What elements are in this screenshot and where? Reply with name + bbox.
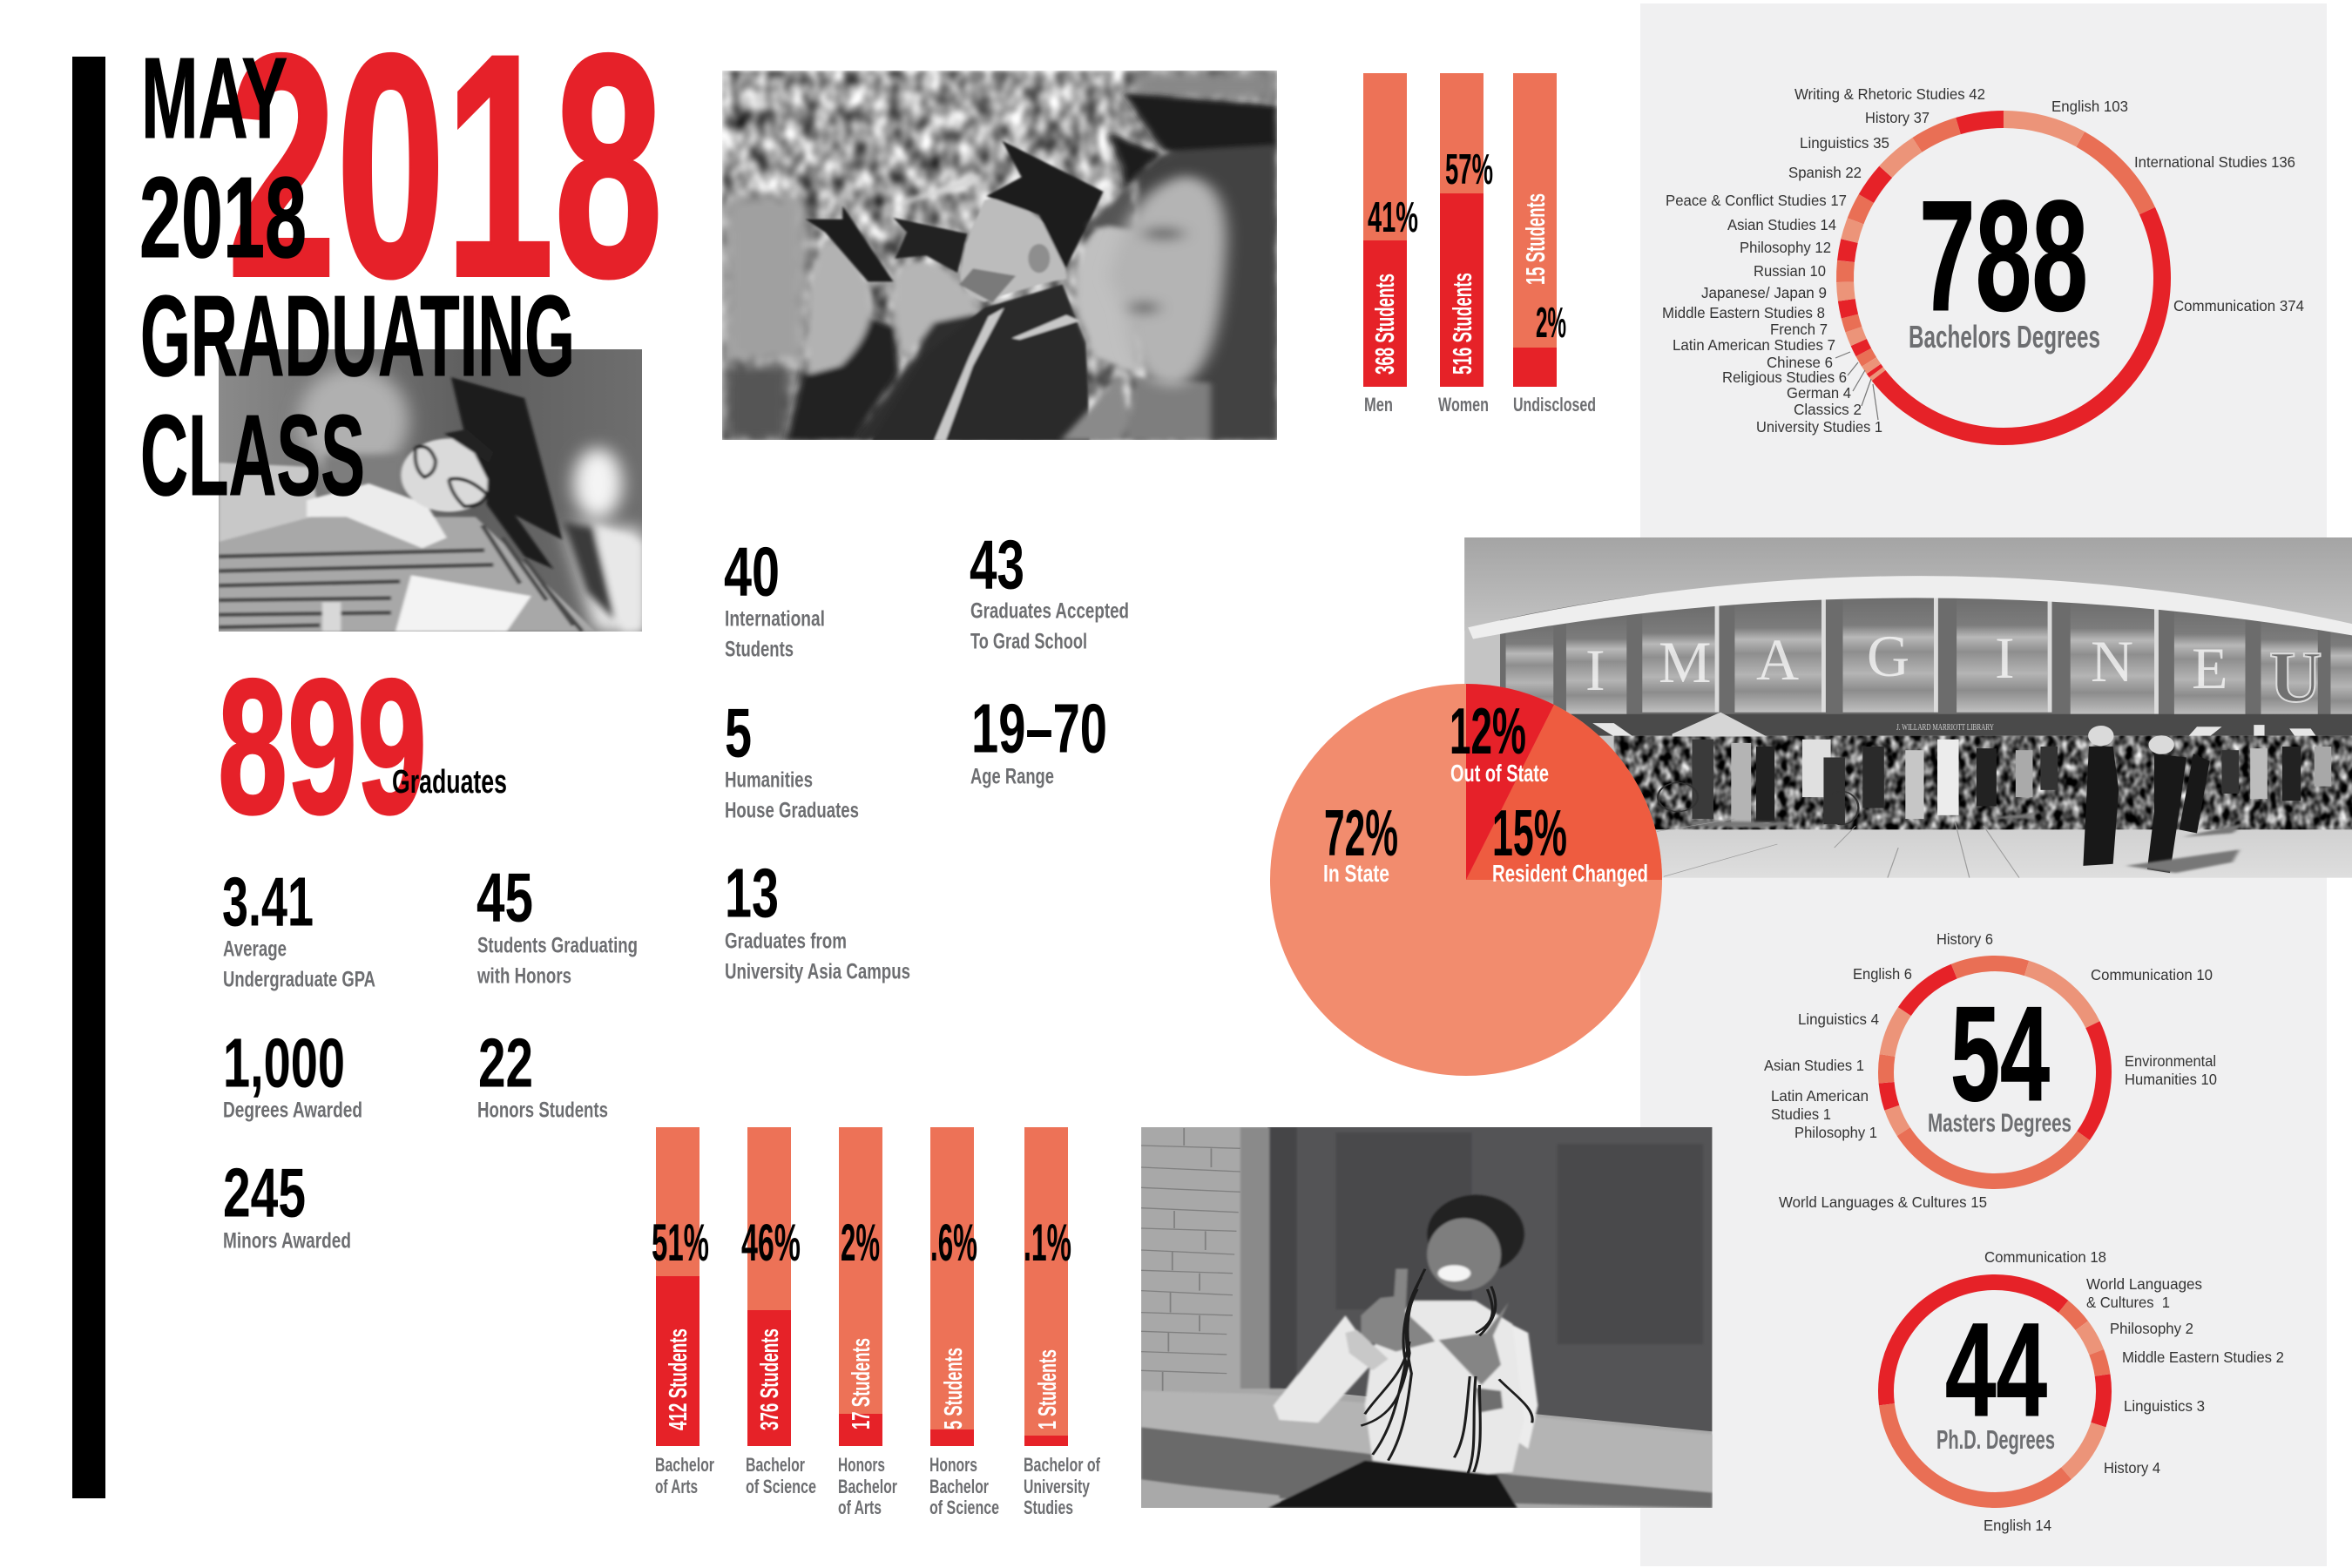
stat: 45 honors graduates: with Honors [476,963,571,988]
pie chart: residency: In State [1323,860,1389,887]
donut chart: 54 masters degrees: 54 [1950,978,2050,1129]
donut chart: 44 PhD degrees [1842,1238,2284,1544]
donut chart: 788 bachelors degrees: University Studies 1 [1756,418,1882,436]
donut chart: 788 bachelors degrees: Middle Eastern Studies 8 [1662,304,1825,321]
title: May 2018 Graduating Class: MAY [141,34,287,162]
bar chart: degree types: 2% [841,1213,880,1272]
bar chart: degree types: University [1024,1476,1091,1497]
stat: 40 international students: Students [725,638,794,662]
bar chart: degree types: of Arts [655,1476,698,1497]
title: May 2018 Graduating Class [139,34,575,519]
stat: 13 asia campus: Graduates from [725,929,847,953]
donut chart: 788 bachelors degrees: Classics 2 [1794,401,1862,418]
stat: 5 humanities house [725,693,859,822]
building banner lettering: E [2192,635,2228,701]
stat: 40 international students [724,533,825,662]
pie chart: residency: Resident Changed [1492,860,1648,887]
stat: 43 grad school: Graduates Accepted [970,599,1129,624]
stat: 5 humanities house: 5 [725,693,752,772]
donut chart: 44 PhD degrees: Communication 18 [1984,1248,2106,1266]
bar chart: gender: 57% [1445,146,1493,193]
donut chart: 54 masters degrees: History 6 [1936,930,1993,948]
stat: 3.41 GPA [222,862,375,991]
donut chart: 44 PhD degrees: 44 [1945,1295,2047,1444]
pie chart: residency: 12% [1450,694,1526,767]
pie chart: residency [1270,684,1662,1076]
donut chart: 54 masters degrees: Masters Degrees [1928,1109,2072,1138]
stat: 1,000 degrees: 1,000 [223,1024,345,1101]
photo: crowd in front of Marriott Library [1464,537,2352,878]
donut chart: 54 masters degrees [1764,921,2217,1224]
donut chart: 54 masters degrees: Studies 1 [1771,1105,1831,1123]
stat: 45 honors graduates: Students Graduating [477,934,638,958]
donut chart: 788 bachelors degrees: French 7 [1770,321,1828,338]
donut chart: 788 bachelors degrees: Latin American Studies 7 [1673,336,1835,354]
stat: 13 asia campus: University Asia Campus [725,960,910,984]
stat: 1,000 degrees [223,1024,362,1122]
stat: 1,000 degrees: Degrees Awarded [223,1098,362,1122]
building banner lettering: I [1995,625,2015,691]
bar chart: degree types: of Arts [838,1497,882,1518]
bar chart: degree types: 17 Students [848,1338,875,1429]
building banner lettering: A [1756,626,1799,693]
donut chart: 788 bachelors degrees: Communication 374 [2173,297,2304,314]
bar chart: gender: 516 Students [1447,273,1477,375]
bar chart: degree types [652,1127,1100,1518]
title: May 2018 Graduating Class: CLASS [140,391,365,519]
donut chart: 788 bachelors degrees: Philosophy 12 [1740,239,1831,256]
bar chart: gender: 41% [1368,194,1418,241]
donut chart: 54 masters degrees: Humanities 10 [2125,1071,2217,1088]
stat: 45 honors graduates [476,859,638,988]
photo: graduate hugging family member [219,349,642,632]
donut chart: 44 PhD degrees: Ph.D. Degrees [1936,1424,2055,1455]
bar chart: degree types: of Science [746,1476,816,1497]
bar chart: degree types: of Science [929,1497,999,1518]
building banner lettering: G [1867,623,1909,689]
bar chart: gender: Women [1438,394,1489,416]
donut chart: 44 PhD degrees: World Languages [2086,1275,2202,1293]
donut chart: 788 bachelors degrees: Linguistics 35 [1800,134,1889,152]
black vertical bar [72,57,105,1498]
pie chart: residency: Out of State [1450,760,1549,787]
donut chart: 788 bachelors degrees: History 37 [1865,109,1930,126]
stat: 13 asia campus: 13 [725,854,779,932]
stat: 245 minors: 245 [223,1153,306,1232]
building banner lettering: M [1659,629,1711,695]
library name sign: J. WILLARD MARRIOTT LIBRARY [1896,723,1994,733]
panel: grey degrees background [1640,3,2327,1566]
bar chart: degree types: 412 Students [665,1328,693,1430]
photo: student making U hand sign [1141,1127,1712,1508]
stat: 43 grad school: To Grad School [970,629,1087,653]
donut chart: 788 bachelors degrees: Chinese 6 [1767,354,1833,371]
bar chart: degree types: 1 Students [1034,1349,1062,1429]
bar chart: degree types: Bachelor [929,1476,989,1497]
donut chart: 54 masters degrees: Asian Studies 1 [1764,1057,1864,1074]
stat: 245 minors: Minors Awarded [223,1228,351,1253]
stat: 45 honors graduates: 45 [476,859,533,936]
donut chart: 44 PhD degrees: History 4 [2104,1459,2160,1477]
stat: 22 honors students: 22 [478,1024,533,1101]
donut chart: 44 PhD degrees: English 14 [1984,1517,2051,1534]
stat: 5 humanities house: House Graduates [725,798,859,822]
donut chart: 788 bachelors degrees: Religious Studies 6 [1722,368,1847,386]
bar chart: gender: 368 Students [1369,274,1400,375]
donut chart: 788 bachelors degrees: Bachelors Degrees [1909,319,2100,355]
donut chart: 44 PhD degrees: Linguistics 3 [2124,1397,2205,1415]
bar chart: degree types: Honors [929,1454,977,1476]
bar chart: degree types: 5 Students [940,1348,968,1429]
donut chart: 44 PhD degrees: Philosophy 2 [2110,1320,2193,1337]
donut chart: 54 masters degrees: English 6 [1853,965,1912,983]
pie chart: residency: 15% [1492,796,1567,869]
bar chart: degree types: Honors [838,1454,885,1476]
donut chart: 788 bachelors degrees: Japanese/ Japan 9 [1701,284,1827,301]
bar chart: degree types: 46% [741,1213,801,1272]
bar chart: degree types: Bachelor [838,1476,897,1497]
stat: 899 graduates: 899 [218,639,427,854]
donut chart: 788 bachelors degrees: German 4 [1787,384,1851,402]
stat: 40 international students: International [725,606,825,631]
donut chart: 788 bachelors degrees: 788 [1919,168,2088,344]
stat: 22 honors students [477,1024,608,1122]
university U logo on facade: U [2269,637,2322,718]
donut chart: 788 bachelors degrees: English 103 [2051,98,2128,115]
stat: 19-70 age range: Age Range [970,765,1054,789]
pie chart: residency: 72% [1324,796,1398,869]
donut chart: 788 bachelors degrees: Writing & Rhetoric Studies 42 [1794,85,1985,103]
bar chart: degree types: .1% [1024,1213,1071,1272]
building banner lettering: N [2091,628,2133,694]
bar chart: degree types: Bachelor [655,1454,714,1476]
bar chart: gender: Men [1364,394,1393,416]
donut chart: 788 bachelors degrees: Peace & Conflict Studies 17 [1666,192,1847,209]
donut chart: 54 masters degrees: Linguistics 4 [1798,1010,1879,1028]
photo: graduates seated at commencement [722,71,1277,441]
stat: 3.41 GPA: Average [223,937,287,962]
bar chart: degree types: Studies [1024,1497,1073,1518]
stat: 22 honors students: Honors Students [477,1098,608,1122]
bar chart: gender [1363,73,1596,416]
donut chart: 54 masters degrees: Philosophy 1 [1794,1124,1877,1141]
donut chart: 44 PhD degrees: & Cultures 1 [2086,1294,2170,1311]
bar chart: gender: Undisclosed [1513,394,1596,416]
donut chart: 788 bachelors degrees: Asian Studies 14 [1727,216,1836,233]
stat: 19-70 age range [970,690,1107,789]
stat: 5 humanities house: Humanities [725,768,813,793]
donut chart: 788 bachelors degrees [1662,54,2304,502]
building banner lettering [1587,636,2225,690]
bar chart: degree types: 51% [652,1213,709,1272]
stat: 43 grad school [970,526,1129,653]
donut chart: 54 masters degrees: World Languages & Cultures 15 [1779,1193,1987,1211]
bar chart: degree types: 376 Students [756,1328,784,1430]
donut chart: 788 bachelors degrees: Spanish 22 [1788,164,1862,181]
bar chart: degree types: .6% [930,1213,977,1272]
donut chart: 54 masters degrees: Communication 10 [2091,966,2213,983]
stat: 43 grad school: 43 [970,526,1024,603]
stat: 40 international students: 40 [724,533,780,610]
stat: 899 graduates: Graduates [392,764,507,801]
bar chart: degree types: Bachelor of [1024,1454,1100,1476]
stat: 3.41 GPA: Undergraduate GPA [223,967,375,991]
bar chart: gender: 2% [1536,300,1566,347]
donut chart: 44 PhD degrees: Middle Eastern Studies 2 [2122,1348,2284,1366]
stat: 13 asia campus [725,854,910,984]
title: May 2018 Graduating Class: GRADUATING [140,272,575,400]
donut chart: 54 masters degrees: Latin American [1771,1087,1869,1105]
donut chart: 788 bachelors degrees: International Studies 136 [2134,153,2295,171]
bar chart: degree types: Bachelor [746,1454,805,1476]
donut chart: 788 bachelors degrees: Russian 10 [1754,262,1826,280]
stat: 19-70 age range: 19–70 [971,690,1107,767]
bar chart: gender: 15 Students [1520,193,1551,285]
title: May 2018 Graduating Class: 2018 [139,153,307,281]
stat: 3.41 GPA: 3.41 [222,862,314,941]
donut chart: 54 masters degrees: Environmental [2125,1052,2216,1070]
building banner lettering: I [1585,637,1605,703]
